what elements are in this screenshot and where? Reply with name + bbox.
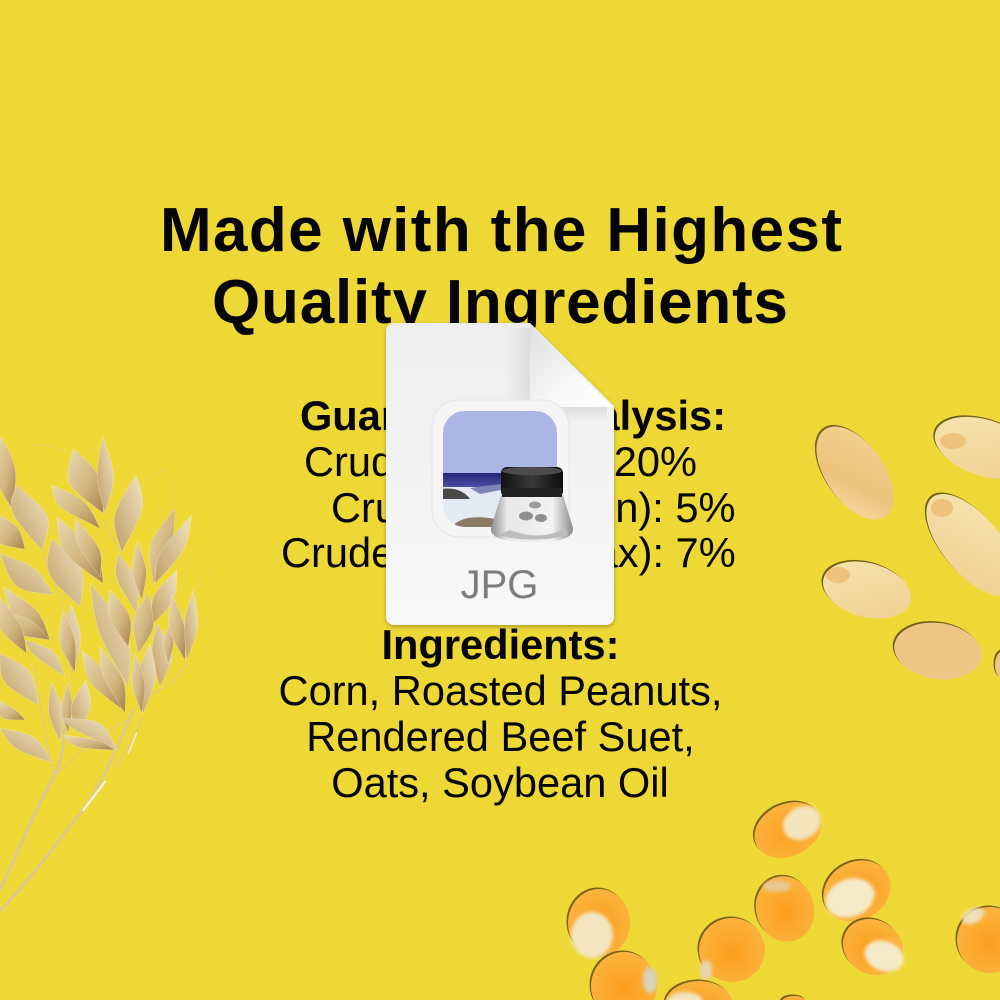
kernel 10 <box>780 994 807 1000</box>
illustration: peanuts <box>799 404 1000 685</box>
preview thumbnail frame <box>432 400 569 537</box>
title: Quality Ingredients <box>212 268 788 337</box>
text block: ingredients: Corn, Roasted Peanuts, <box>279 667 722 714</box>
kernel 8 <box>698 916 765 982</box>
text block: guaranteed analysis <box>281 392 736 576</box>
peanut 3 <box>908 477 1000 611</box>
text block: ingredients: Oats, Soybean Oil <box>331 759 669 806</box>
folded corner <box>530 325 612 407</box>
file type label: JPG <box>461 563 538 607</box>
kernel 4 <box>831 907 913 986</box>
oat spikelets <box>0 437 198 763</box>
kernel 2 <box>747 868 822 948</box>
text block: ingredients <box>279 621 722 806</box>
kernel 7 <box>590 950 657 1000</box>
inkwell jar <box>491 467 573 542</box>
text block: guaranteed analysis: Crude Protein: 20% <box>304 438 697 485</box>
title <box>160 196 842 337</box>
title: Made with the Highest <box>160 196 842 265</box>
kernel 5 <box>956 905 1000 973</box>
kernel 9 <box>664 980 733 1000</box>
kernel 1 <box>744 790 831 868</box>
peanut 5 <box>889 616 985 685</box>
text block: guaranteed analysis: Crude Fiber (Max): 7% <box>281 529 736 576</box>
text block: ingredients: Rendered Beef Suet, <box>306 713 695 760</box>
document page <box>386 323 614 625</box>
illustration: oat sprig <box>0 437 212 911</box>
peanut 1 <box>799 411 909 533</box>
peanut 2 <box>925 404 1000 491</box>
text block: ingredients: Ingredients: <box>381 621 620 668</box>
text block: guaranteed analysis: Crude Fat (Min): 5% <box>331 484 735 531</box>
text block: guaranteed analysis: Guaranteed Analysis: <box>300 392 726 439</box>
illustration: corn kernels <box>566 790 1000 1000</box>
shadows under fold <box>505 328 607 423</box>
peanut 6: edge <box>994 650 1000 679</box>
peanut 4 <box>815 551 917 628</box>
kernel 3 <box>811 847 902 934</box>
oat stems <box>0 445 212 911</box>
icon: JPG file document <box>386 323 614 625</box>
kernel 6 <box>566 888 630 958</box>
preview thumbnail photo <box>443 411 557 527</box>
